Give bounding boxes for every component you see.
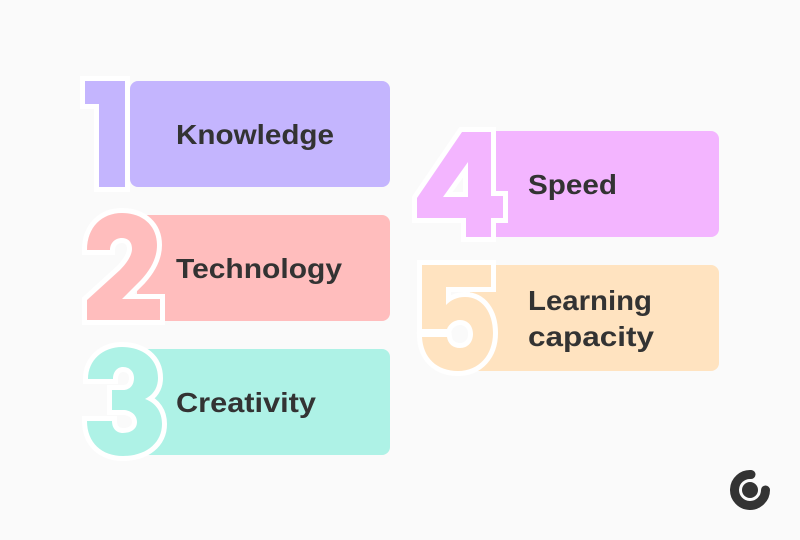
label: speed: Speed — [528, 169, 617, 200]
numeral 1 — [85, 81, 125, 187]
panel: creativity — [140, 349, 390, 455]
numeral 2 — [87, 213, 160, 320]
label: creativity: Creativity — [176, 387, 316, 418]
icon: logo — [735, 474, 766, 505]
panel: knowledge — [130, 81, 390, 187]
item 1: knowledge — [85, 81, 390, 187]
numeral 4 — [417, 132, 503, 237]
label: technology: Technology — [176, 253, 342, 284]
label: learning capacity: capacity — [528, 321, 654, 352]
panel: learning capacity — [470, 265, 719, 371]
numeral 3 — [87, 347, 162, 456]
label: learning capacity — [528, 285, 654, 352]
item 5: learning capacity — [422, 265, 719, 371]
item 4: speed — [417, 131, 719, 237]
panel: technology — [137, 215, 390, 321]
panel: speed — [480, 131, 719, 237]
label: knowledge: Knowledge — [176, 119, 334, 150]
numeral 5 — [422, 265, 493, 371]
label: learning capacity: Learning — [528, 285, 652, 316]
item 2: technology — [87, 213, 390, 321]
item 3: creativity — [87, 347, 390, 456]
